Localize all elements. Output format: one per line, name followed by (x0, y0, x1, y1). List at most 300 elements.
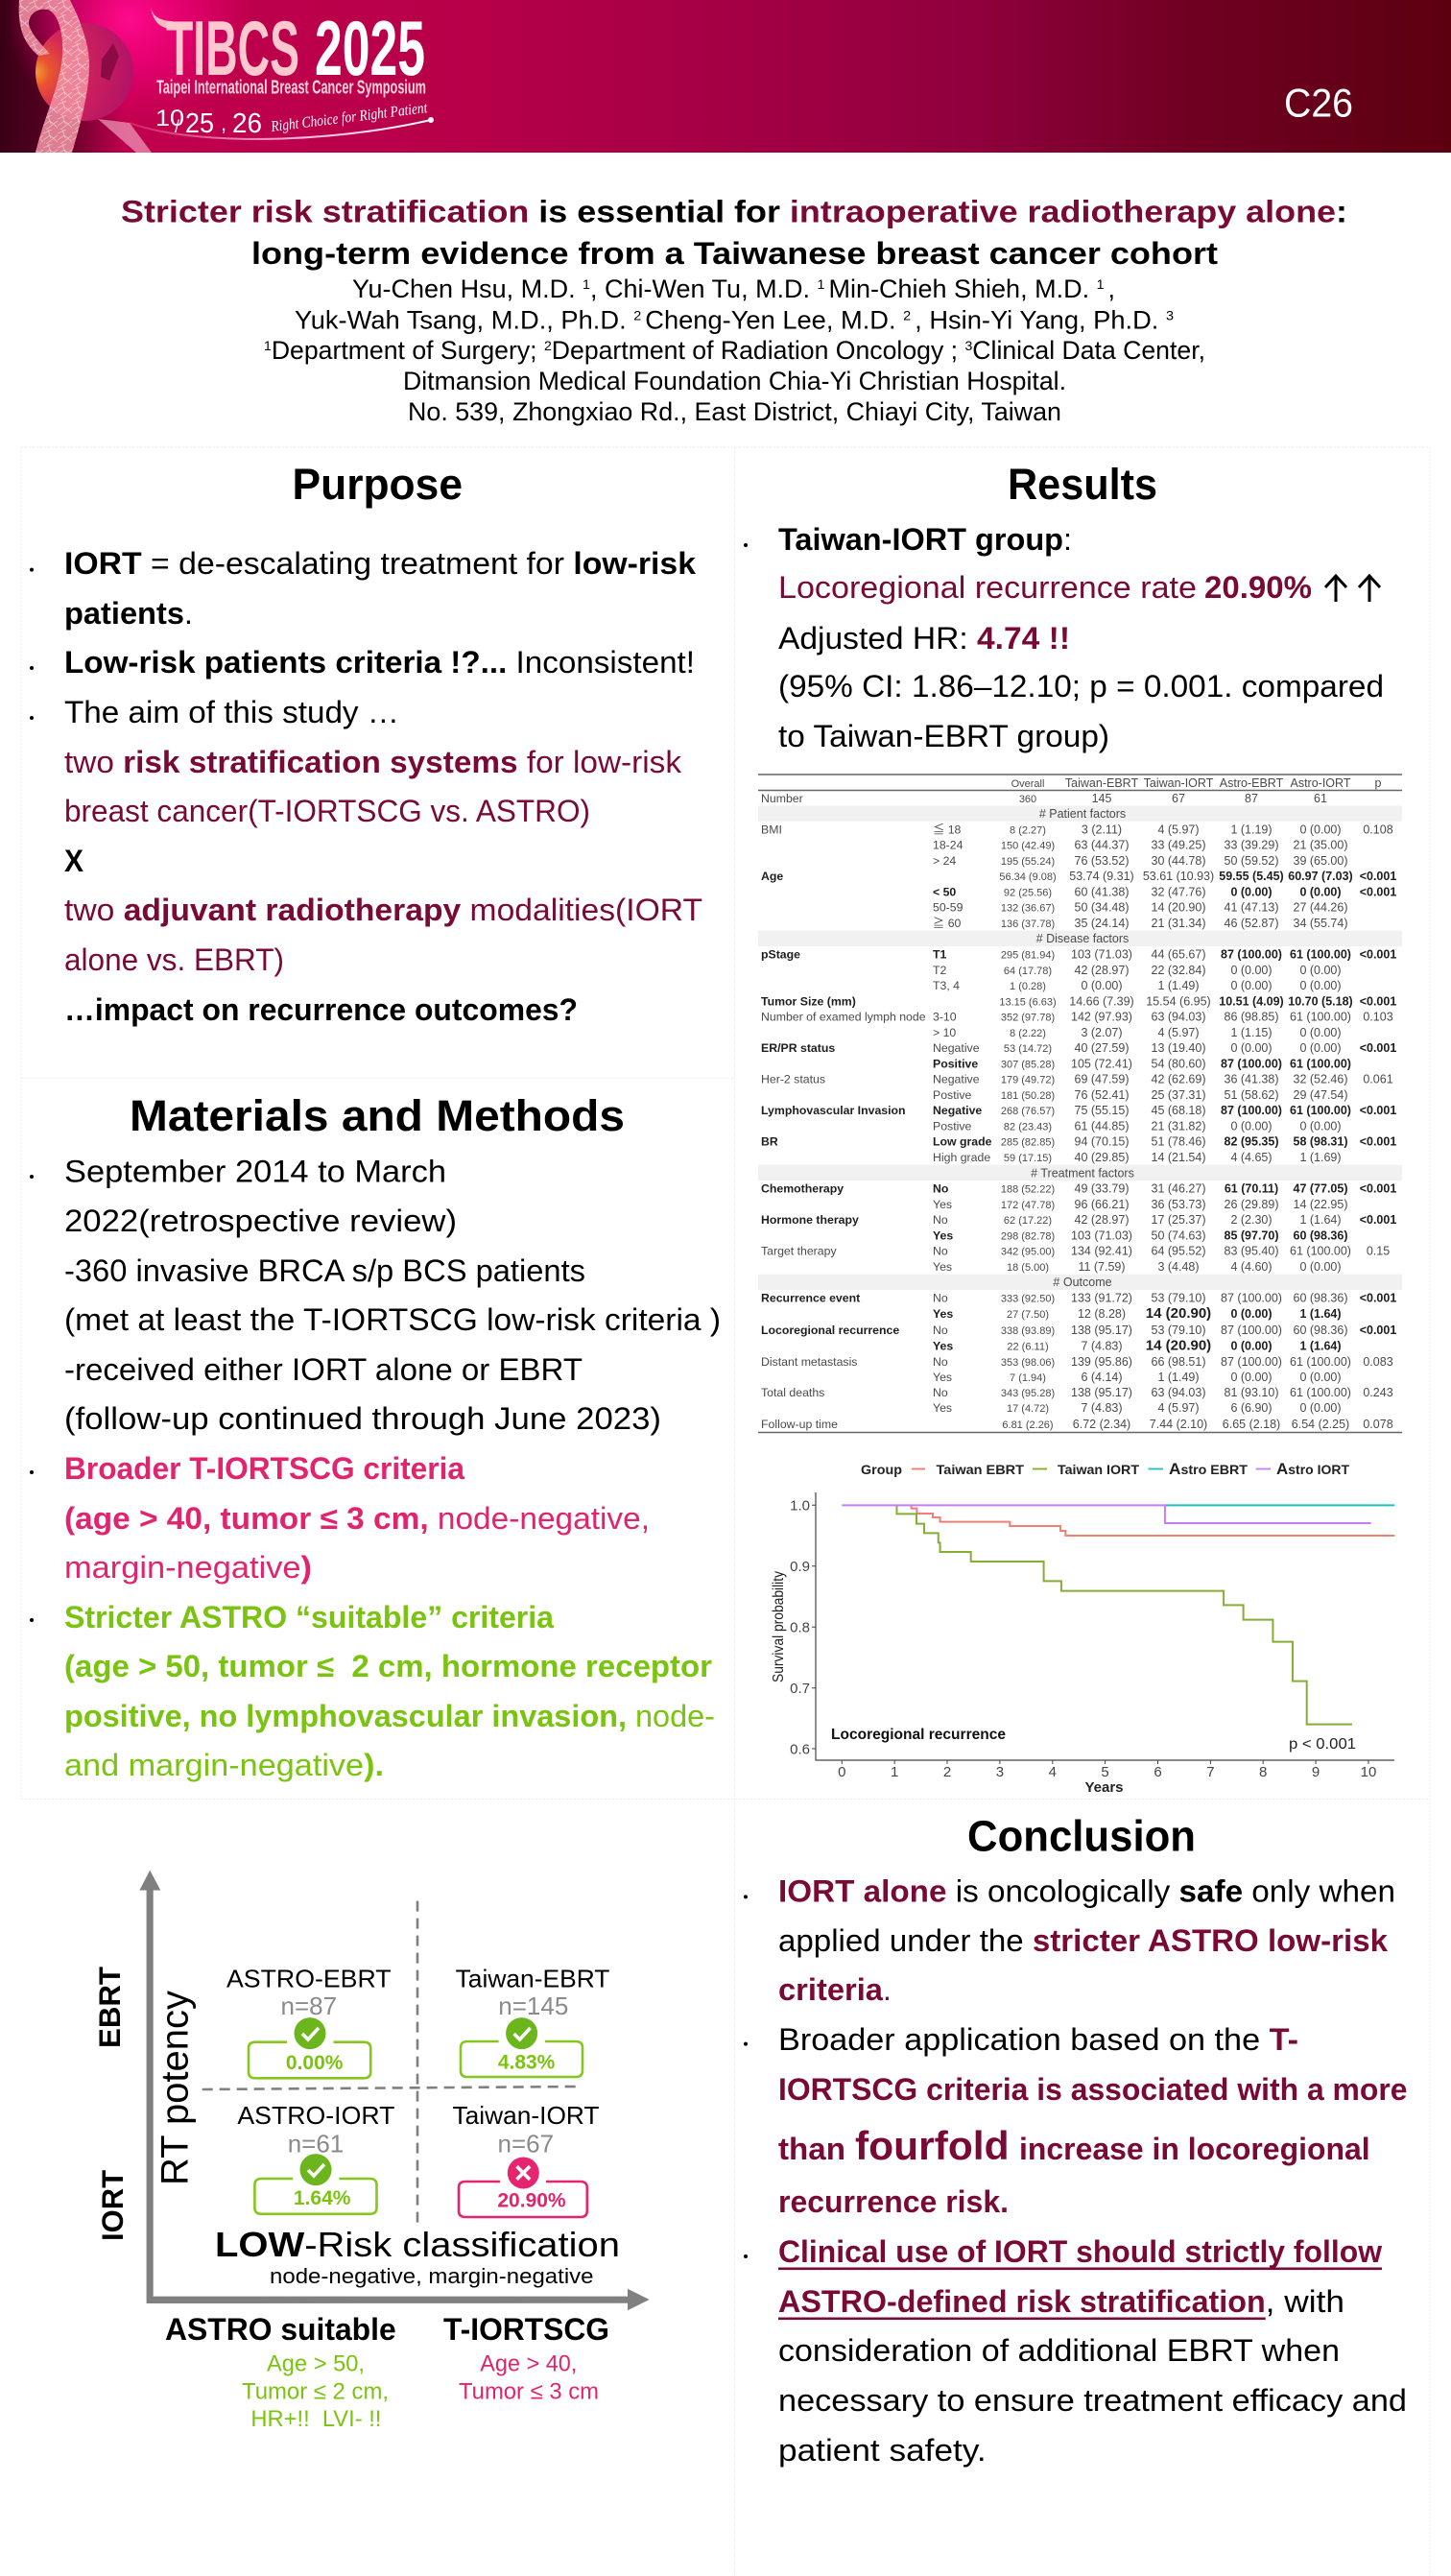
table: baseline characteristics: 21 (31.82) (1152, 1119, 1205, 1133)
axes: 2 (943, 1764, 951, 1780)
table: baseline characteristics: 0.083 (1363, 1355, 1393, 1369)
table: baseline characteristics: 82 (23.43) (1004, 1121, 1052, 1133)
table: baseline characteristics: 32 (47.76) (1152, 885, 1205, 898)
table: baseline characteristics: <0.001 (1360, 1324, 1396, 1337)
table: baseline characteristics: 51 (58.62) (1225, 1088, 1278, 1102)
table: baseline characteristics: p (1375, 776, 1382, 790)
table: baseline characteristics: 53.61 (10.93) (1143, 870, 1214, 883)
table: baseline characteristics: 75 (55.15) (1075, 1104, 1129, 1117)
table: baseline characteristics: 61 (100.00) (1290, 948, 1351, 962)
table: baseline characteristics: 342 (95.00) (1001, 1247, 1055, 1258)
authors and affiliations: 1 (264, 338, 272, 353)
table: baseline characteristics: 53 (79.10) (1152, 1324, 1205, 1337)
legend: Astro IORT (1276, 1460, 1349, 1478)
logo: TIBCS 2025: 10 (155, 106, 184, 131)
logo: TIBCS 2025: , (221, 111, 226, 135)
text: results summary: Locoregional recurrence rate (778, 570, 1197, 605)
survival curves (842, 1505, 1394, 1725)
text: results summary: Taiwan-IORT group: (778, 522, 1072, 557)
cell: ASTRO-IORT (237, 2101, 395, 2214)
table: baseline characteristics: 0 (0.00) (1230, 964, 1273, 977)
table: baseline characteristics: 0 (0.00) (1230, 1339, 1273, 1352)
axes: 0.7 (790, 1681, 810, 1697)
table: baseline characteristics: BR (761, 1135, 778, 1149)
table: baseline characteristics: 61 (44.85) (1075, 1119, 1129, 1133)
table: baseline characteristics: 14 (20.90) (1146, 1305, 1211, 1322)
table: baseline characteristics: 83 (95.40) (1225, 1245, 1278, 1258)
table: baseline characteristics: 25 (37.31) (1152, 1088, 1205, 1102)
table: baseline characteristics: 49 (33.79) (1075, 1182, 1129, 1196)
text: purpose body: two risk stratification systems for low-risk (64, 745, 682, 779)
table: baseline characteristics: 0 (0.00) (1230, 1371, 1273, 1384)
table: baseline characteristics: 0 (0.00) (1230, 979, 1273, 992)
table: baseline characteristics: 87 (100.00) (1221, 948, 1282, 962)
table: baseline characteristics: <0.001 (1360, 994, 1396, 1008)
table: baseline characteristics: T1 (933, 948, 947, 962)
table: baseline characteristics: 7.44 (2.10) (1150, 1418, 1207, 1431)
table: baseline characteristics: No (933, 1355, 948, 1369)
table: baseline characteristics: 76 (52.41) (1075, 1088, 1129, 1102)
table: baseline characteristics: 132 (36.67) (1001, 903, 1055, 915)
table: baseline characteristics: 46 (52.87) (1225, 917, 1278, 930)
axis labels: RT potency (154, 1991, 196, 2185)
table: baseline characteristics: > 24 (933, 854, 956, 868)
table: baseline characteristics: 14 (20.90) (1152, 901, 1205, 915)
table: baseline characteristics: 12 (8.28) (1078, 1307, 1126, 1321)
table: baseline characteristics: Her-2 status (761, 1073, 825, 1086)
table: baseline characteristics: 138 (95.17) (1071, 1386, 1132, 1399)
table: baseline characteristics: BMI (761, 823, 782, 836)
table: baseline characteristics: 6.54 (2.25) (1292, 1418, 1349, 1431)
text: purpose body: alone vs. EBRT) (64, 942, 284, 977)
table: baseline characteristics: <0.001 (1360, 1135, 1396, 1149)
criteria: T-IORTSCG: Tumor ≤ 3 cm (459, 2378, 599, 2404)
table: baseline characteristics: 60.97 (7.03) (1288, 870, 1353, 883)
table: baseline characteristics: 0 (0.00) (1230, 885, 1273, 898)
axes: 0.9 (790, 1559, 810, 1575)
authors and affiliations: 3 (1166, 307, 1174, 322)
table: baseline characteristics: 1 (0.28) (1010, 981, 1046, 992)
table: baseline characteristics: 63 (94.03) (1152, 1011, 1205, 1024)
table: baseline characteristics: 0 (0.00) (1299, 885, 1342, 898)
table: baseline characteristics: 59.55 (5.45) (1219, 870, 1284, 883)
logo: TIBCS 2025: 26 (232, 108, 262, 139)
text: purpose body: breast cancer(T-IORTSCG vs. ASTRO) (64, 794, 590, 828)
table: baseline characteristics: 21 (35.00) (1294, 839, 1347, 852)
table: baseline characteristics: 54 (80.60) (1152, 1057, 1205, 1070)
bullets: conclusion (744, 1895, 748, 2258)
icon: globe and ribbon (19, 0, 152, 153)
table: baseline characteristics: 0 (0.00) (1230, 1307, 1273, 1321)
table: baseline characteristics: 4 (5.97) (1157, 1401, 1200, 1415)
authors and affiliations: 2 (633, 307, 645, 322)
table: baseline characteristics: 8 (2.22) (1010, 1028, 1046, 1039)
table: baseline characteristics: 33 (49.25) (1152, 839, 1205, 852)
table: baseline characteristics: 11 (7.59) (1078, 1260, 1126, 1274)
title block: long-term evidence from a Taiwanese breast cancer cohort (251, 236, 1218, 271)
table: baseline characteristics: 61 (100.00) (1290, 1104, 1351, 1117)
authors and affiliations: Yu-Chen Hsu, M.D. (352, 274, 571, 303)
authors and affiliations: Yuk-Wah Tsang, M.D., Ph.D. (295, 305, 617, 334)
text: study design: (follow-up continued through June 2023) (64, 1401, 661, 1436)
table: baseline characteristics: Negative (933, 1041, 980, 1055)
text: results summary: to Taiwan-EBRT group) (778, 719, 1109, 753)
text: fourfold risk: fourfold (855, 2123, 1010, 2168)
cell: Taiwan-IORT: n=67 (498, 2129, 554, 2158)
table: baseline characteristics: 103 (71.03) (1071, 948, 1132, 962)
table: baseline characteristics: <0.001 (1360, 885, 1396, 898)
table: baseline characteristics: 41 (47.13) (1225, 901, 1278, 915)
chart annotation (831, 1727, 1356, 1753)
table: baseline characteristics: 1 (1.15) (1230, 1026, 1273, 1039)
table: baseline characteristics: 0.15 (1367, 1245, 1390, 1258)
text: IORT safety (778, 1874, 1395, 2007)
table: baseline characteristics: 22 (6.11) (1007, 1341, 1049, 1352)
table: baseline characteristics: 0.078 (1363, 1418, 1393, 1431)
table: baseline characteristics: 32 (52.46) (1294, 1073, 1347, 1086)
table: baseline characteristics: 33 (39.29) (1225, 839, 1278, 852)
table: baseline characteristics: 60 (98.36) (1294, 1324, 1347, 1337)
authors and affiliations: 2 (544, 338, 552, 353)
axes: 10 (1361, 1764, 1376, 1780)
table: baseline characteristics: 53.74 (9.31) (1069, 870, 1134, 883)
table: baseline characteristics: 87 (100.00) (1221, 1057, 1282, 1070)
table: baseline characteristics: Negative (933, 1073, 980, 1086)
table: baseline characteristics: 285 (82.85) (1001, 1137, 1055, 1149)
axes (771, 1492, 1394, 1796)
axes: 0 (838, 1764, 845, 1780)
cell: Taiwan-EBRT: 4.83% (498, 2051, 556, 2073)
text: fourfold risk (778, 2022, 1407, 2219)
axes: Survival probability (771, 1571, 787, 1682)
axis labels (92, 1967, 196, 2241)
text: clinical recommendation: ASTRO-defined risk stratification (778, 2284, 1266, 2319)
table: baseline characteristics: 92 (25.56) (1004, 887, 1052, 898)
table: baseline characteristics: 85 (97.70) (1225, 1228, 1278, 1242)
chart: Kaplan-Meier locoregional recurrence (771, 1460, 1394, 1796)
table: baseline characteristics: 62 (17.22) (1004, 1215, 1052, 1227)
table: baseline characteristics: 53 (14.72) (1004, 1043, 1052, 1055)
table: baseline characteristics: Target therapy (761, 1245, 837, 1258)
table: baseline characteristics: ≦ 18 (933, 822, 962, 836)
table: baseline characteristics: Recurrence event (761, 1291, 860, 1304)
table: baseline characteristics: 17 (25.37) (1152, 1213, 1205, 1227)
panel: conclusion (744, 1812, 1407, 2468)
table: baseline characteristics: 353 (98.06) (1001, 1357, 1055, 1369)
header banner (0, 0, 1451, 153)
title block (121, 194, 1347, 426)
text: IORT safety: IORT alone is oncologically safe only when (778, 1874, 1395, 1909)
axes: 3 (996, 1764, 1004, 1780)
table: baseline characteristics: 338 (93.89) (1001, 1325, 1055, 1337)
table: baseline characteristics: <0.001 (1360, 948, 1396, 962)
table: baseline characteristics: 26 (29.89) (1225, 1198, 1278, 1211)
table: baseline characteristics: 0 (0.00) (1299, 823, 1342, 836)
table: baseline characteristics: 4 (5.97) (1157, 823, 1200, 836)
text: stricter ASTRO criteria (64, 1600, 715, 1782)
table: baseline characteristics: 0.061 (1363, 1073, 1393, 1086)
table: baseline characteristics: 0 (0.00) (1299, 1119, 1342, 1133)
table: baseline characteristics: 14 (21.54) (1152, 1151, 1205, 1164)
axes: 4 (1049, 1764, 1057, 1780)
table: baseline characteristics: Number of examed lymph node (761, 1011, 926, 1024)
text: purpose body: …impact on recurrence outcomes? (64, 992, 578, 1027)
text: fourfold risk: recurrence risk. (778, 2184, 1009, 2219)
table: baseline characteristics: Lymphovascular Invasion (761, 1104, 906, 1117)
text: results summary: (95% CI: 1.86–12.10; p = 0.001. compared (778, 669, 1384, 704)
cell: Taiwan-IORT (453, 2101, 600, 2217)
text: study design: (met at least the T-IORTSCG low-risk criteria ) (64, 1302, 721, 1337)
table: baseline characteristics: 81 (93.10) (1225, 1386, 1278, 1399)
table: baseline characteristics: Astro-EBRT (1220, 776, 1284, 790)
table: baseline characteristics: 8 (2.27) (1010, 824, 1046, 836)
authors and affiliations: , Hsin-Yi Yang, Ph.D. (915, 305, 1166, 334)
table: baseline characteristics: 40 (29.85) (1075, 1151, 1129, 1164)
table: baseline characteristics: 66 (98.51) (1152, 1355, 1205, 1369)
logo: TIBCS 2025 (130, 6, 434, 139)
table: baseline characteristics: No (933, 1182, 949, 1196)
table: baseline characteristics: 30 (44.78) (1152, 854, 1205, 868)
text: study design: September 2014 to March (64, 1154, 446, 1188)
table: baseline characteristics: 307 (85.28) (1001, 1059, 1055, 1070)
axes: 1.0 (790, 1497, 810, 1515)
cell: ASTRO-EBRT: ASTRO-EBRT (226, 1964, 392, 1992)
table: baseline characteristics: 0 (0.00) (1299, 1041, 1342, 1055)
text: clinical recommendation: patient safety. (778, 2433, 987, 2468)
table: baseline characteristics: 39 (65.00) (1294, 854, 1347, 868)
table: baseline characteristics: No (933, 1291, 948, 1304)
text: fourfold risk: Broader application based on the T- (778, 2022, 1298, 2057)
table: baseline characteristics: 36 (53.73) (1152, 1198, 1205, 1211)
chart annotation: Locoregional recurrence (831, 1727, 1006, 1743)
cell: Taiwan-IORT: 20.90% (497, 2190, 566, 2212)
bullet: results (744, 543, 748, 547)
table: baseline characteristics: Taiwan-EBRT (1065, 776, 1138, 790)
criteria: ASTRO suitable: Tumor ≤ 2 cm, (242, 2378, 389, 2404)
chart annotation: p < 0.001 (1289, 1736, 1356, 1753)
table: baseline characteristics: 1 (1.64) (1299, 1307, 1342, 1321)
table: baseline characteristics: 13 (19.40) (1152, 1041, 1205, 1055)
authors and affiliations: , Chi-Wen Tu, M.D. (590, 274, 818, 303)
table: baseline characteristics: 139 (95.86) (1071, 1355, 1132, 1369)
text: results summary (778, 522, 1384, 753)
table: baseline characteristics: No (933, 1386, 948, 1399)
criteria: T-IORTSCG: Age > 40, (480, 2351, 577, 2376)
table: baseline characteristics: 22 (32.84) (1152, 964, 1205, 977)
cell: Taiwan-EBRT: Taiwan-EBRT (456, 1964, 610, 1992)
table: baseline characteristics: # Outcome (1053, 1276, 1112, 1289)
table: baseline characteristics: Yes (933, 1307, 953, 1321)
text: purpose body: The aim of this study … (64, 695, 399, 729)
table: baseline characteristics: 51 (78.46) (1152, 1135, 1205, 1149)
table: baseline characteristics: 4 (4.65) (1230, 1151, 1273, 1164)
legend: Astro EBRT (1169, 1460, 1248, 1478)
table: baseline characteristics: 0 (0.00) (1230, 1041, 1273, 1055)
table: baseline characteristics: 0 (0.00) (1299, 1401, 1342, 1415)
table: baseline characteristics: 103 (71.03) (1071, 1228, 1132, 1242)
table: baseline characteristics: Taiwan-IORT (1144, 776, 1214, 790)
criteria: ASTRO suitable (165, 2312, 396, 2432)
authors and affiliations: Cheng-Yen Lee, M.D. (645, 305, 903, 334)
panel: results (744, 460, 1402, 1796)
panel: purpose (30, 460, 702, 1027)
cell: Taiwan-EBRT: n=145 (498, 1992, 568, 2020)
text: IORT safety: criteria. (778, 1972, 892, 2007)
authors and affiliations: Department of Radiation Oncology ; (552, 336, 964, 365)
table: baseline characteristics: 63 (44.37) (1075, 839, 1129, 852)
table: baseline characteristics: 18 (5.00) (1007, 1262, 1049, 1274)
authors and affiliations: Min-Chieh Shieh, M.D. (828, 274, 1097, 303)
quadrant dividers (202, 1901, 579, 2229)
table: baseline characteristics: # Patient factors (1039, 807, 1126, 821)
table: baseline characteristics: 0.108 (1363, 823, 1393, 836)
table: baseline characteristics: 87 (1245, 792, 1258, 805)
table: baseline characteristics: 67 (1172, 792, 1185, 805)
table: baseline characteristics: 31 (46.27) (1152, 1182, 1205, 1196)
table: baseline characteristics: 27 (44.26) (1294, 901, 1347, 915)
text: study design: -received either IORT alone or EBRT (64, 1352, 583, 1387)
text: purpose body: Low-risk patients criteria !?... Inconsistent! (64, 645, 695, 680)
table: baseline characteristics: 195 (55.24) (1001, 856, 1055, 868)
arrow: RT potency axis (139, 1871, 650, 2310)
heading: conclusion: Conclusion (967, 1812, 1196, 1861)
table: baseline characteristics: Total deaths (761, 1386, 824, 1399)
table: baseline characteristics: 50 (34.48) (1075, 901, 1129, 915)
table: baseline characteristics: 145 (1092, 792, 1111, 805)
table: baseline characteristics: 105 (72.41) (1071, 1057, 1132, 1070)
table: baseline characteristics: 47 (77.05) (1294, 1182, 1347, 1196)
axes: 6 (1154, 1764, 1162, 1780)
criteria: T-IORTSCG: T-IORTSCG (443, 2312, 609, 2347)
authors and affiliations: 3 (964, 338, 973, 353)
cell: ASTRO-EBRT (226, 1964, 392, 2078)
logo: TIBCS 2025: / (175, 117, 179, 136)
table: baseline characteristics: <0.001 (1360, 1213, 1396, 1227)
table: baseline characteristics: Yes (933, 1228, 953, 1242)
table: baseline characteristics: # Treatment factors (1031, 1166, 1134, 1180)
table: baseline characteristics: 61 (100.00) (1290, 1245, 1351, 1258)
table: baseline characteristics: 6.65 (2.18) (1223, 1418, 1280, 1431)
table: baseline characteristics: Tumor Size (mm) (761, 994, 856, 1008)
table: baseline characteristics: T3, 4 (933, 979, 960, 992)
table: baseline characteristics: 42 (28.97) (1075, 1213, 1129, 1227)
table: baseline characteristics: 10.70 (5.18) (1288, 994, 1353, 1008)
cell: ASTRO-EBRT: 0.00% (286, 2052, 344, 2074)
table: baseline characteristics: Overall (1011, 778, 1044, 790)
logo: TIBCS 2025: TIBCS (166, 6, 299, 92)
table: baseline characteristics: 18-24 (933, 839, 963, 852)
authors and affiliations: 1 (818, 276, 828, 292)
table: baseline characteristics: 142 (97.93) (1071, 1011, 1132, 1024)
table: baseline characteristics: 36 (41.38) (1225, 1073, 1278, 1086)
heading: low-risk classification: node-negative, margin-negative (270, 2264, 593, 2288)
cell: ASTRO-IORT: n=61 (288, 2129, 344, 2158)
table: baseline characteristics: 64 (95.52) (1152, 1245, 1205, 1258)
table: baseline characteristics: < 50 (933, 885, 956, 898)
poster number: C26 (1284, 81, 1353, 126)
authors and affiliations (264, 274, 1205, 426)
table: baseline characteristics: 15.54 (6.95) (1146, 994, 1211, 1008)
text: IORT safety: applied under the stricter ASTRO low-risk (778, 1923, 1388, 1958)
authors and affiliations: 1 (583, 276, 590, 292)
table: baseline characteristics: <0.001 (1360, 870, 1396, 883)
table: baseline characteristics: 181 (50.28) (1001, 1090, 1055, 1102)
cell: ASTRO-EBRT: n=87 (281, 1992, 337, 2020)
bullets: purpose (30, 568, 34, 720)
table: baseline characteristics: 60 (98.36) (1294, 1291, 1347, 1304)
text: stricter ASTRO criteria: and margin-negative ). (64, 1748, 384, 1782)
table: baseline characteristics: 14 (22.95) (1294, 1198, 1347, 1211)
table: baseline characteristics: High grade (933, 1151, 990, 1164)
table: baseline characteristics: ≧ 60 (933, 916, 962, 930)
table: baseline characteristics: 61 (1314, 792, 1327, 805)
criteria: ASTRO suitable: HR+!! LVI- !! (250, 2406, 381, 2432)
table: baseline characteristics: Postive (933, 1088, 971, 1102)
legend: Taiwan IORT (1058, 1462, 1139, 1477)
axes: 9 (1312, 1764, 1320, 1780)
text: purpose body: patients. (64, 596, 193, 631)
table: baseline characteristics (758, 775, 1402, 1432)
table: baseline characteristics: Yes (933, 1260, 952, 1274)
table: baseline characteristics: 352 (97.78) (1001, 1013, 1055, 1024)
table: baseline characteristics: ER/PR status (761, 1041, 835, 1055)
table: baseline characteristics: 87 (100.00) (1221, 1291, 1282, 1304)
criteria: T-IORTSCG (443, 2312, 609, 2404)
table: baseline characteristics: 42 (62.69) (1152, 1073, 1205, 1086)
logo: TIBCS 2025: 25 (185, 108, 214, 139)
text: broader T-IORTSCG criteria: (age > 40, tumor ≤ 3 cm, node-negative, (64, 1501, 650, 1536)
table: baseline characteristics: 7 (4.83) (1081, 1339, 1123, 1352)
table: baseline characteristics: 53 (79.10) (1152, 1291, 1205, 1304)
table: baseline characteristics: Low grade (933, 1135, 992, 1149)
table: baseline characteristics: 1 (1.69) (1299, 1151, 1342, 1164)
logo: TIBCS 2025: Taipei International Breast Cancer Symposium (156, 77, 426, 98)
table: baseline characteristics: 34 (55.74) (1294, 917, 1347, 930)
text: clinical recommendation: , with (1266, 2284, 1344, 2319)
axes: 7 (1206, 1764, 1215, 1780)
table: baseline characteristics: T2 (933, 964, 947, 977)
authors and affiliations: 2 (903, 307, 915, 322)
text: study design (64, 1154, 721, 1436)
table: baseline characteristics: Chemotherapy (761, 1182, 844, 1196)
diagram: risk classification by RT modality (92, 1871, 650, 2432)
table: baseline characteristics: 136 (37.78) (1001, 918, 1055, 930)
table: baseline characteristics: Yes (933, 1198, 952, 1211)
text: fourfold risk: increase in locoregional (1019, 2132, 1370, 2166)
table: baseline characteristics: 360 (1019, 794, 1036, 805)
table: baseline characteristics: 61 (100.00) (1290, 1386, 1351, 1399)
table: baseline characteristics: 94 (70.15) (1075, 1135, 1129, 1149)
table: baseline characteristics: 29 (47.54) (1294, 1088, 1347, 1102)
table: baseline characteristics: Yes (933, 1339, 953, 1352)
table: baseline characteristics: 295 (81.94) (1001, 950, 1055, 962)
table: baseline characteristics: 7 (1.94) (1010, 1372, 1046, 1384)
text: stricter ASTRO criteria: (age > 50, tumor ≤ 2 cm, hormone receptor (64, 1649, 712, 1683)
table: baseline characteristics: Positive (933, 1057, 978, 1070)
authors and affiliations: 1 (1097, 276, 1107, 292)
table: baseline characteristics: 0.243 (1363, 1386, 1393, 1399)
text: purpose body: IORT = de-escalating treatment for low-risk (64, 546, 696, 581)
authors and affiliations: Ditmansion Medical Foundation Chia-Yi Christian Hospital. (403, 367, 1066, 395)
cell: ASTRO-IORT: ASTRO-IORT (237, 2101, 395, 2130)
table: baseline characteristics: 1 (1.49) (1157, 1371, 1200, 1384)
authors and affiliations: Department of Surgery; (272, 336, 544, 365)
table: baseline characteristics: 4 (5.97) (1157, 1026, 1200, 1039)
text: clinical recommendation: consideration of additional EBRT when (778, 2333, 1340, 2368)
table: baseline characteristics: Yes (933, 1401, 952, 1415)
table: baseline characteristics: 1 (1.49) (1157, 979, 1200, 992)
table: baseline characteristics: # Disease factors (1036, 932, 1129, 945)
